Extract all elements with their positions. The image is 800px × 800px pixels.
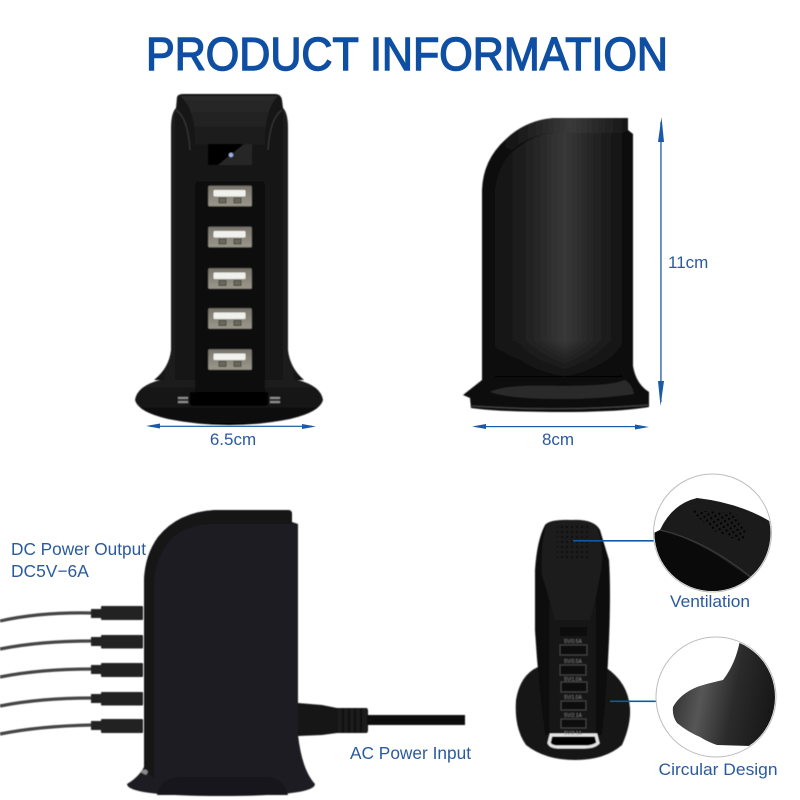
rating labels and ports: 5V/2.1A — [564, 731, 583, 737]
tower body — [154, 94, 304, 380]
rear notch — [140, 770, 148, 775]
USB port 5 — [208, 348, 252, 370]
foot tab — [190, 392, 268, 406]
label: 8cm: 8cm — [542, 430, 574, 449]
side face — [495, 133, 622, 376]
base disc — [135, 372, 323, 425]
title: PRODUCT INFORMATION — [146, 28, 668, 80]
label: DC power output — [11, 539, 146, 581]
panel: power output and input view — [0, 510, 465, 796]
rating labels and ports: 5V/1.0A — [564, 677, 583, 683]
side body — [482, 118, 633, 376]
AC plug and cable — [298, 703, 465, 736]
tower shape — [535, 520, 610, 735]
label: circular design: Circular Design — [658, 760, 778, 779]
arrow: width 8cm — [472, 424, 649, 430]
callout: ventilation detail circle — [653, 474, 772, 592]
label: DC power output: DC Power Output — [11, 539, 146, 559]
panel: side view — [463, 118, 649, 412]
base handle cutout — [549, 735, 598, 747]
USB port 2 — [208, 226, 252, 248]
cables and DC plugs — [0, 606, 143, 734]
callout line: circular design — [610, 700, 656, 702]
side base — [463, 366, 649, 412]
label: 6.5cm: 6.5cm — [210, 430, 256, 449]
port window — [560, 627, 587, 636]
tower body — [127, 510, 315, 796]
panel: angled tower view — [516, 520, 630, 760]
rating labels and ports: 5V/0.5A — [564, 639, 583, 645]
USB port 4 — [208, 308, 252, 330]
centre face — [180, 96, 278, 394]
rating labels and ports: 5V/1.0A — [564, 695, 583, 701]
tower upper face — [542, 521, 602, 620]
label: AC power input: AC Power Input — [350, 743, 471, 763]
label: 11cm: 11cm — [668, 253, 708, 272]
USB port 1 — [208, 185, 252, 207]
rating labels and ports — [560, 639, 587, 737]
callout: circular design detail circle — [656, 635, 780, 757]
label: DC power output: DC5V−6A — [11, 561, 89, 581]
base notches — [178, 397, 280, 403]
USB port 3 — [208, 268, 252, 290]
vent dots — [557, 525, 588, 558]
arrow: width 6.5cm — [146, 424, 316, 429]
arrow: height 11cm — [658, 117, 664, 406]
shoulder highlights — [176, 110, 282, 150]
rating labels and ports: 5V/2.1A — [564, 713, 583, 719]
body edge — [144, 510, 292, 778]
rating labels and ports: 5V/0.5A — [564, 659, 583, 665]
side lower shading — [495, 340, 622, 377]
label: ventilation: Ventilation — [670, 592, 750, 611]
panel: front view with dimension — [135, 94, 323, 425]
callout line: ventilation — [573, 540, 654, 542]
LED window — [208, 144, 252, 165]
base highlight — [157, 777, 288, 795]
circular base — [516, 667, 630, 760]
side top cap — [500, 118, 628, 150]
